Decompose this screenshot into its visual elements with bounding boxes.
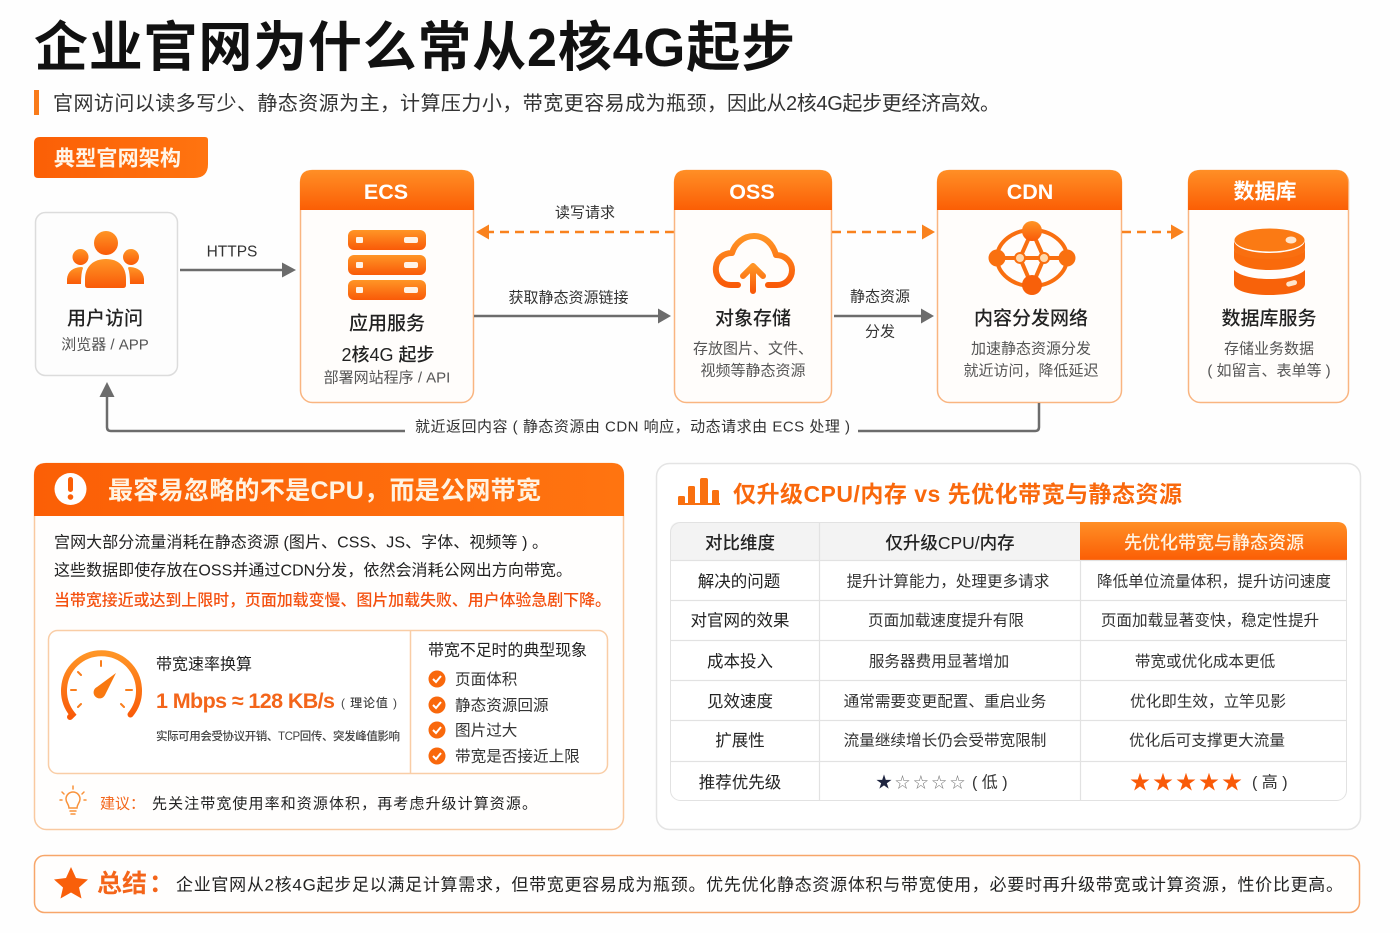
arrow: get static link: 获取静态资源链接 bbox=[508, 290, 629, 306]
row: scalability: 优化后可支撑更大流量 bbox=[1129, 732, 1285, 750]
row: speed: 优化即生效，立竿见影 bbox=[1130, 692, 1286, 710]
row: problem bbox=[698, 572, 1331, 591]
panel header: 最容易忽略的不是CPU，而是公网带宽 bbox=[108, 476, 541, 505]
summary bar: 总结 bbox=[97, 870, 147, 898]
icon: database bbox=[1234, 228, 1305, 295]
node: database: 数据库 bbox=[1234, 180, 1296, 204]
check list: 页面体积 bbox=[455, 670, 517, 688]
node: database: 存储业务数据 bbox=[1224, 340, 1314, 358]
arrow: return content bbox=[100, 382, 1039, 436]
icon: bar chart bbox=[678, 478, 720, 505]
icon: cloud upload bbox=[716, 236, 792, 291]
row: priority bbox=[699, 772, 1288, 794]
arrow: HTTPS: HTTPS bbox=[207, 244, 257, 260]
row: speed: 见效速度 bbox=[707, 692, 773, 711]
inner card: 1 Mbps ≈ 128 KB/s bbox=[156, 689, 335, 713]
advice: 先关注带宽使用率和资源体积，再考虑升级计算资源。 bbox=[152, 794, 537, 812]
node: OSS: 存放图片、文件、 bbox=[693, 340, 813, 358]
node: ECS: ECS bbox=[364, 180, 408, 204]
check list: 带宽是否接近上限 bbox=[455, 748, 580, 766]
row: priority: ★★★★★ bbox=[1130, 772, 1242, 794]
node: ECS: 应用服务 bbox=[349, 312, 425, 334]
row: speed: 通常需要变更配置、重启业务 bbox=[844, 692, 1046, 710]
subtitle: 官网访问以读多写少、静态资源为主， bbox=[53, 92, 400, 115]
summary bar: ： bbox=[149, 870, 174, 898]
row: effect bbox=[690, 611, 1319, 630]
icon: star bbox=[54, 867, 88, 898]
row: scalability bbox=[715, 731, 1285, 750]
check list: 静态资源回源 bbox=[455, 696, 549, 714]
subtitle: 因此从2核4G起步更经济高效。 bbox=[727, 92, 1000, 115]
table header: 仅升级CPU/内存 bbox=[885, 533, 1015, 553]
intro text: 这些数据即使存放在OSS并通过CDN分发，依然会消耗公网出方向带宽。 bbox=[54, 562, 572, 580]
inner card bbox=[48, 630, 608, 774]
intro text bbox=[54, 534, 611, 610]
row: problem: 解决的问题 bbox=[698, 572, 780, 591]
row: scalability: 扩展性 bbox=[715, 731, 765, 750]
inner card: 实际可用会受协议开销、TCP回传、突发峰值影响 bbox=[156, 729, 400, 743]
node: CDN: 就近访问，降低延迟 bbox=[963, 362, 1099, 380]
inner card: ( 理论值 ) bbox=[341, 695, 397, 710]
row: cost bbox=[707, 652, 1276, 671]
inner card: 带宽速率换算 bbox=[156, 654, 252, 674]
node: OSS: OSS bbox=[729, 180, 775, 204]
icon: users bbox=[67, 231, 144, 288]
check list: 图片过大 bbox=[455, 722, 517, 740]
node: OSS: 视频等静态资源 bbox=[700, 362, 806, 380]
node: database: 数据库服务 bbox=[1221, 308, 1317, 330]
arrow: CDN to database dashed bbox=[1122, 224, 1184, 240]
arrow: get static link bbox=[474, 290, 671, 324]
inner card: 带宽不足时的典型现象 bbox=[428, 642, 587, 660]
section tag: architecture: 典型官网架构 bbox=[54, 148, 181, 170]
row: speed bbox=[707, 692, 1286, 711]
summary bar: 企业官网从2核4G起步足以满足计算需求，但带宽更容易成为瓶颈。优先优化静态资源体积与带宽使用，必要时再升级带宽或计算资源，性价比更高。 bbox=[176, 874, 1343, 894]
subtitle: 计算压力小，带宽更容易成为瓶颈， bbox=[400, 92, 727, 115]
icon: gauge bbox=[64, 653, 139, 717]
row: priority: ( 低 ) bbox=[972, 774, 1008, 792]
section tag: architecture bbox=[34, 137, 208, 178]
table header: 对比维度 bbox=[705, 533, 775, 553]
node: database: ( 如留言、表单等 ) bbox=[1207, 362, 1331, 380]
row: effect: 页面加载显著变快，稳定性提升 bbox=[1101, 612, 1319, 630]
check list bbox=[428, 670, 580, 766]
row: problem: 提升计算能力，处理更多请求 bbox=[847, 572, 1050, 590]
table header bbox=[705, 533, 1304, 553]
title: 企业官网为什么常从2核4G起步 bbox=[34, 18, 795, 78]
arrow: static distribution: 静态资源 bbox=[850, 288, 910, 306]
row: cost: 带宽或优化成本更低 bbox=[1135, 652, 1276, 670]
arrow: static distribution bbox=[834, 288, 934, 340]
row: problem: 降低单位流量体积，提升访问速度 bbox=[1097, 572, 1331, 590]
node: ECS: 部署网站程序 / API bbox=[324, 370, 450, 386]
row: priority: ☆☆☆☆ bbox=[895, 774, 965, 792]
node: OSS: 对象存储 bbox=[715, 308, 791, 330]
node: CDN bbox=[937, 170, 1122, 402]
row: priority: 推荐优先级 bbox=[699, 773, 781, 792]
node: CDN: 内容分发网络 bbox=[974, 306, 1088, 330]
row: cost: 成本投入 bbox=[707, 652, 773, 671]
node: OSS bbox=[674, 170, 832, 402]
row: priority: ( 高 ) bbox=[1252, 774, 1288, 792]
row: effect: 对官网的效果 bbox=[690, 611, 790, 630]
node: database bbox=[1188, 170, 1348, 402]
table header: 先优化带宽与静态资源 bbox=[1124, 533, 1304, 553]
panel: comparison bbox=[656, 464, 1360, 830]
panel header bbox=[34, 463, 624, 516]
icon: network globe bbox=[988, 221, 1076, 295]
icon: server bbox=[348, 230, 426, 300]
arrow: read write request: 读写请求 bbox=[555, 204, 615, 222]
row: scalability: 流量继续增长仍会受带宽限制 bbox=[844, 732, 1046, 750]
intro text: 当带宽接近或达到上限时，页面加载变慢、图片加载失败、用户体验急剧下降。 bbox=[54, 590, 611, 610]
arrow: read write request bbox=[476, 204, 674, 240]
node: user access: 浏览器 / APP bbox=[61, 336, 149, 354]
node: ECS bbox=[300, 170, 474, 402]
node: user access bbox=[36, 212, 178, 376]
subtitle bbox=[34, 90, 1000, 115]
arrow: static distribution: 分发 bbox=[865, 324, 895, 340]
node: user access: 用户访问 bbox=[67, 308, 143, 330]
node: CDN: CDN bbox=[1007, 180, 1053, 204]
arrow: return content: 就近返回内容 ( 静态资源由 CDN 响应，动态请求由 ECS 处理 ) bbox=[415, 418, 850, 436]
arrow: HTTPS bbox=[180, 244, 296, 278]
node: CDN: 加速静态资源分发 bbox=[971, 340, 1091, 358]
panel: bandwidth warning bbox=[34, 463, 624, 830]
panel heading: 仅升级CPU/内存 vs 先优化带宽与静态资源 bbox=[733, 481, 1182, 507]
intro text: 宫网大部分流量消耗在静态资源 (图片、CSS、JS、字体、视频等 ) 。 bbox=[54, 534, 548, 552]
row: priority: ★ bbox=[876, 774, 892, 792]
row: cost: 服务器费用显著增加 bbox=[869, 652, 1009, 670]
node: ECS: 2核4G 起步 bbox=[341, 345, 435, 365]
comparison table bbox=[670, 522, 1347, 801]
advice bbox=[60, 786, 537, 814]
row: effect: 页面加载速度提升有限 bbox=[868, 612, 1024, 630]
advice: 建议： bbox=[100, 796, 145, 812]
arrow: OSS to CDN dashed bbox=[832, 224, 935, 240]
summary bar bbox=[34, 856, 1360, 912]
